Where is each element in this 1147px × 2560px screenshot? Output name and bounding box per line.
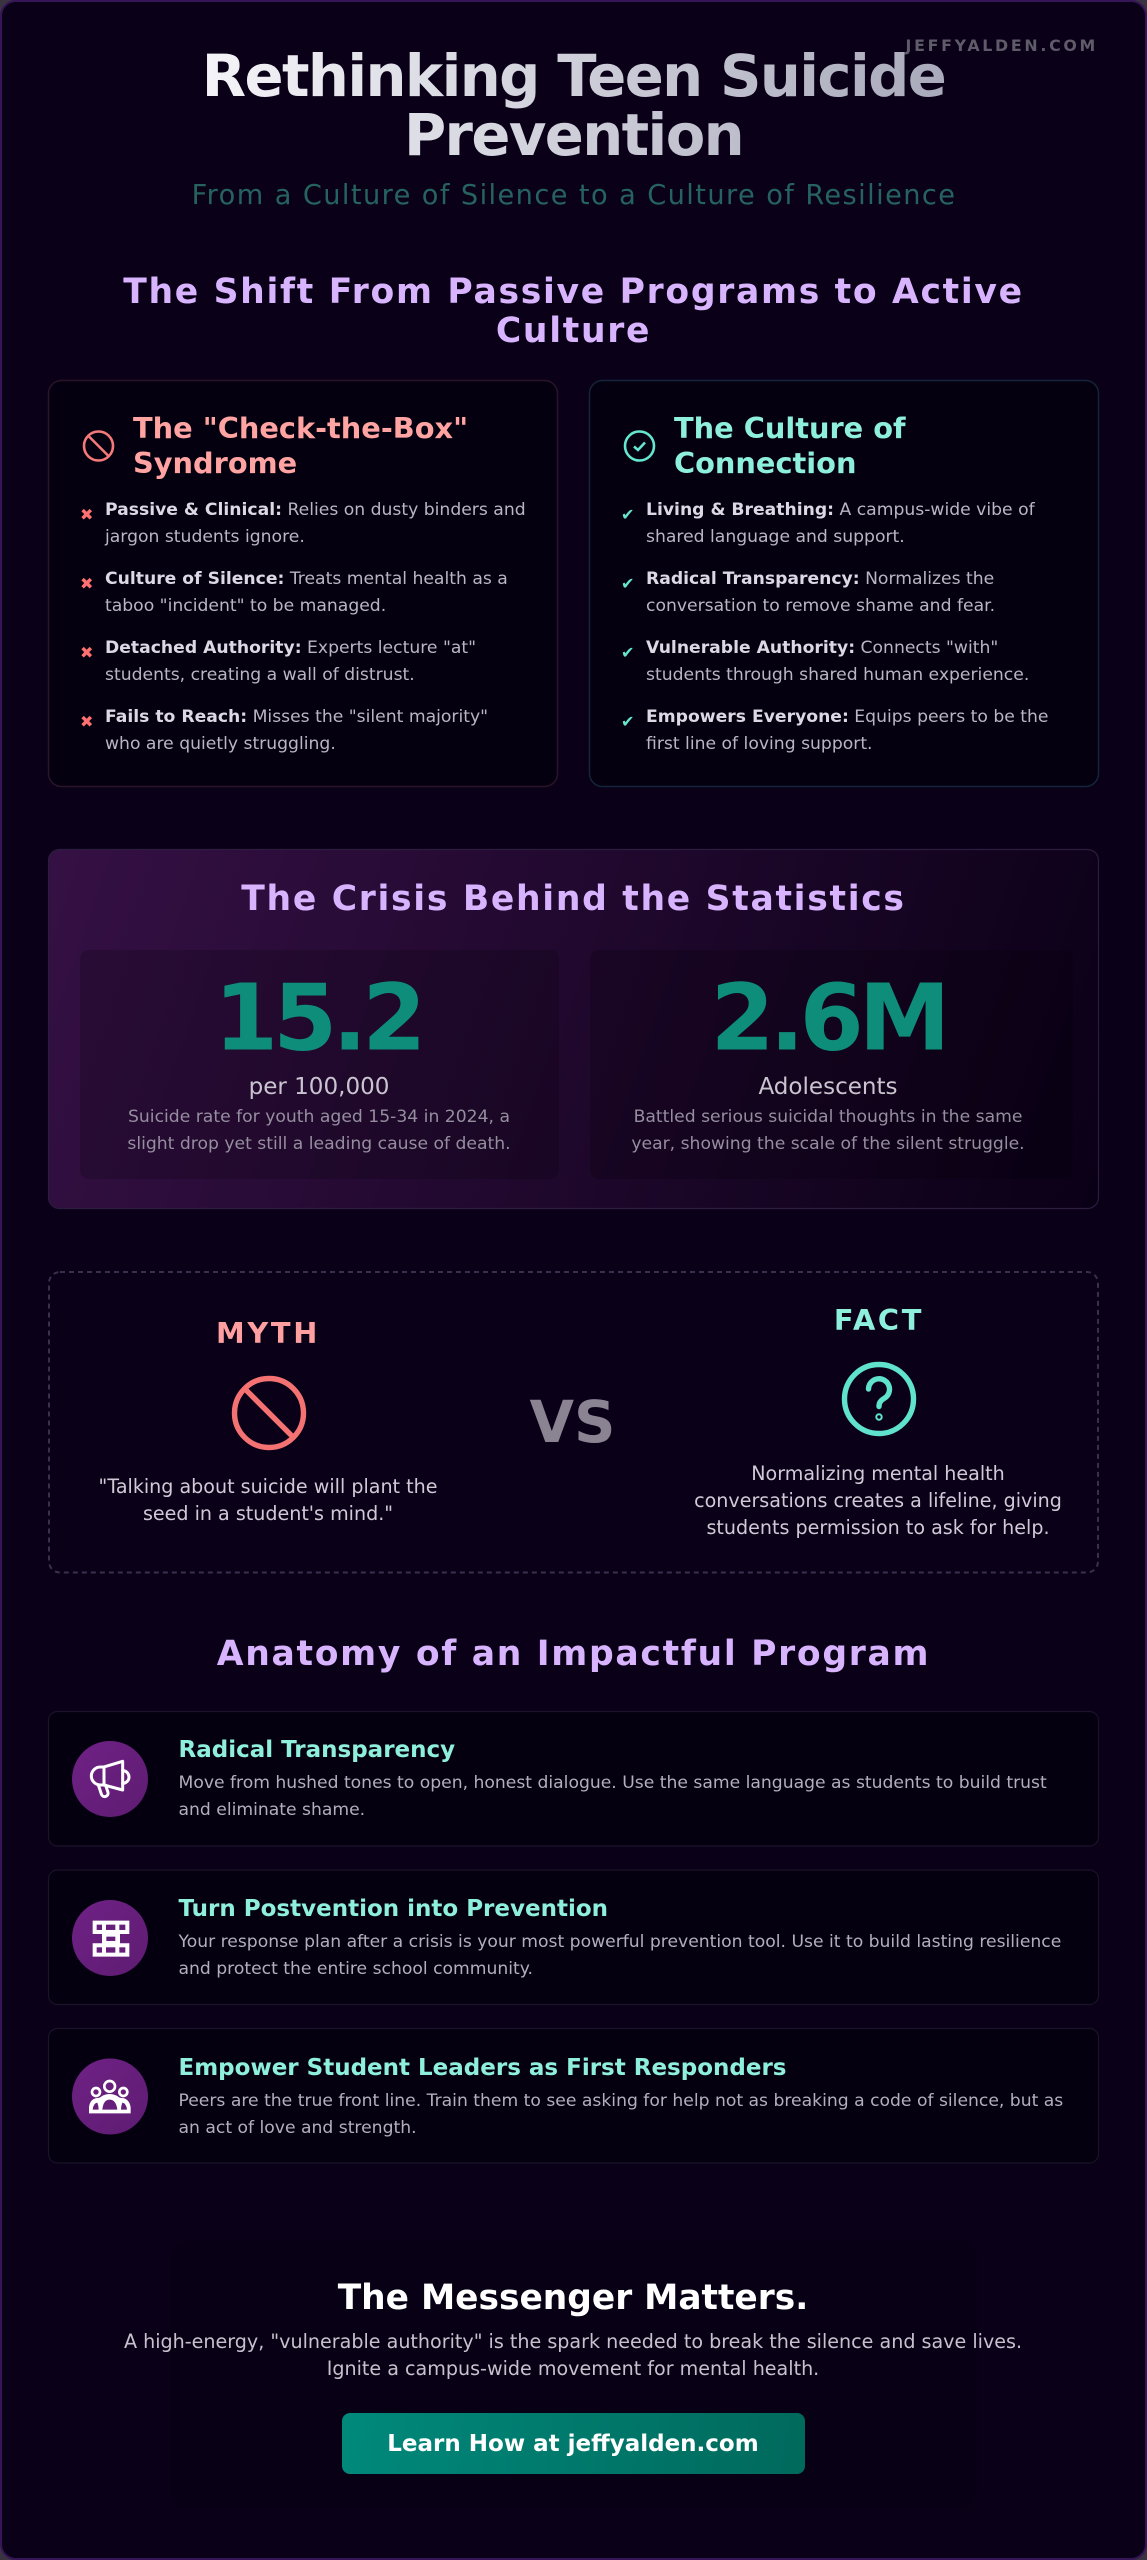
icon: group of people: [89, 2081, 131, 2113]
card heading: The "Check-the-Box": [133, 411, 468, 445]
fact: FACT: [834, 1303, 924, 1337]
list item: ✖: [80, 712, 93, 731]
list item: Passive & Clinical: Relies on dusty binders and: [105, 500, 526, 520]
list item: who are quietly struggling.: [105, 734, 336, 754]
list item: [80, 638, 476, 685]
card text: [178, 1896, 1061, 1979]
myth: MYTH: [216, 1316, 320, 1350]
list item: Living & Breathing: A campus-wide vibe of: [646, 500, 1036, 520]
watermark: JEFFYALDEN.COM: [905, 36, 1098, 55]
footer heading: The Messenger Matters.: [338, 2278, 808, 2318]
card text: an act of love and strength.: [178, 2118, 417, 2138]
card text: Move from hushed tones to open, honest dialogue. Use the same language as students to build trust: [178, 1773, 1047, 1793]
button: Learn How at jeffyalden.com: [387, 2431, 759, 2457]
versus label: VS: [529, 1389, 616, 1456]
list item: Vulnerable Authority: Connects "with": [646, 638, 998, 658]
program card: radical transparency: [48, 1712, 1098, 1846]
heading: anatomy: Anatomy of an Impactful Program: [217, 1634, 930, 1674]
list item: taboo "incident" to be managed.: [105, 596, 386, 616]
card text: Turn Postvention into Prevention: [178, 1896, 608, 1922]
footer text: A high-energy, "vulnerable authority" is the spark needed to break the silence and save lives.: [124, 2330, 1022, 2353]
list item: [80, 500, 526, 547]
stat: 15.2: [80, 950, 559, 1179]
stat: 2.6M: 2.6M: [711, 964, 945, 1072]
list item: students, creating a wall of distrust.: [105, 665, 415, 685]
footer text: Ignite a campus-wide movement for mental health.: [327, 2357, 819, 2380]
list item: [80, 707, 488, 754]
fact: conversations creates a lifeline, giving: [694, 1489, 1062, 1512]
card text: [178, 1737, 1047, 1820]
panel: myth vs fact: [49, 1272, 1098, 1572]
list item: Detached Authority: Experts lecture "at": [105, 638, 476, 658]
panel: crisis statistics: [48, 850, 1098, 1208]
list item: [621, 638, 1029, 685]
fact: students permission to ask for help.: [706, 1516, 1050, 1539]
card text: Your response plan after a crisis is your most powerful prevention tool. Use it to build lasting resilience: [178, 1932, 1061, 1952]
program card: postvention: [48, 1870, 1098, 2004]
heading: the shift: Culture: [496, 311, 651, 351]
card heading: Connection: [674, 446, 856, 480]
icon: check circle: [625, 432, 654, 460]
stat: 2.6M: Battled serious suicidal thoughts in the same: [634, 1107, 1022, 1127]
icon: question mark: [844, 1364, 914, 1434]
card text: Empower Student Leaders as First Responders: [178, 2055, 786, 2081]
stat: 2.6M: Adolescents: [758, 1074, 898, 1100]
icon: wall: [93, 1921, 129, 1957]
list item: jargon students ignore.: [104, 527, 305, 547]
list item: first line of loving support.: [646, 734, 873, 754]
list item: [80, 569, 508, 616]
list item: ✔: [621, 505, 634, 524]
stat: 2.6M: [590, 950, 1073, 1179]
list item: ✖: [80, 574, 93, 593]
title: Rethinking Teen Suicide: [202, 43, 945, 110]
title: [202, 43, 945, 169]
list item: students through shared human experience.: [646, 665, 1029, 685]
myth: "Talking about suicide will plant the: [99, 1475, 437, 1498]
card heading: [133, 411, 468, 480]
myth: [99, 1316, 437, 1525]
list item: ✖: [80, 643, 93, 662]
card heading: The Culture of: [674, 411, 906, 445]
list item: Fails to Reach: Misses the "silent majority": [105, 707, 488, 727]
heading: The Crisis Behind the Statistics: [241, 879, 906, 919]
list item: shared language and support.: [646, 527, 905, 547]
heading: the shift: [123, 272, 1024, 351]
call to action footer: [124, 2240, 1022, 2510]
button: [342, 2413, 805, 2474]
card text: Radical Transparency: [178, 1737, 455, 1763]
list item: conversation to remove shame and fear.: [646, 596, 995, 616]
card text: Peers are the true front line. Train them to see asking for help not as breaking a code of silence, but as: [178, 2091, 1063, 2111]
list item: [621, 500, 1036, 547]
myth: seed in a student's mind.": [143, 1502, 393, 1525]
icon: prohibited large: [234, 1378, 304, 1448]
list item: ✖: [80, 505, 93, 524]
subtitle: From a Culture of Silence to a Culture of Resilience: [192, 180, 956, 211]
list item: Empowers Everyone: Equips peers to be the: [646, 707, 1048, 727]
title: Prevention: [404, 102, 743, 169]
icon: megaphone: [91, 1761, 129, 1797]
stat: 15.2: 15.2: [214, 964, 421, 1072]
card text: [178, 2055, 1063, 2138]
list item: [621, 707, 1048, 754]
list item: [621, 569, 995, 616]
card text: and eliminate shame.: [178, 1800, 365, 1820]
list item: Radical Transparency: Normalizes the: [646, 569, 994, 589]
program card: student leaders: [48, 2028, 1098, 2163]
footer text: [124, 2330, 1022, 2380]
panel: check-the-box syndrome: [48, 380, 558, 786]
card text: and protect the entire school community.: [178, 1959, 533, 1979]
fact: Normalizing mental health: [751, 1462, 1005, 1485]
stat: 2.6M: year, showing the scale of the silent struggle.: [631, 1134, 1025, 1154]
panel: culture of connection: [590, 380, 1098, 786]
list item: ✔: [621, 643, 634, 662]
stat: 15.2: per 100,000: [249, 1074, 389, 1100]
icon: prohibited: [84, 432, 113, 460]
list item: ✔: [621, 574, 634, 593]
stat: 15.2: slight drop yet still a leading cause of death.: [127, 1134, 511, 1154]
list item: Culture of Silence: Treats mental health as a: [105, 569, 508, 589]
heading: the shift: The Shift From Passive Programs to Active: [123, 272, 1024, 312]
list item: ✔: [621, 712, 634, 731]
fact: [694, 1303, 1062, 1539]
card heading: Syndrome: [133, 446, 297, 480]
stat: 15.2: Suicide rate for youth aged 15-34 in 2024, a: [128, 1107, 510, 1127]
card heading: [674, 411, 906, 480]
